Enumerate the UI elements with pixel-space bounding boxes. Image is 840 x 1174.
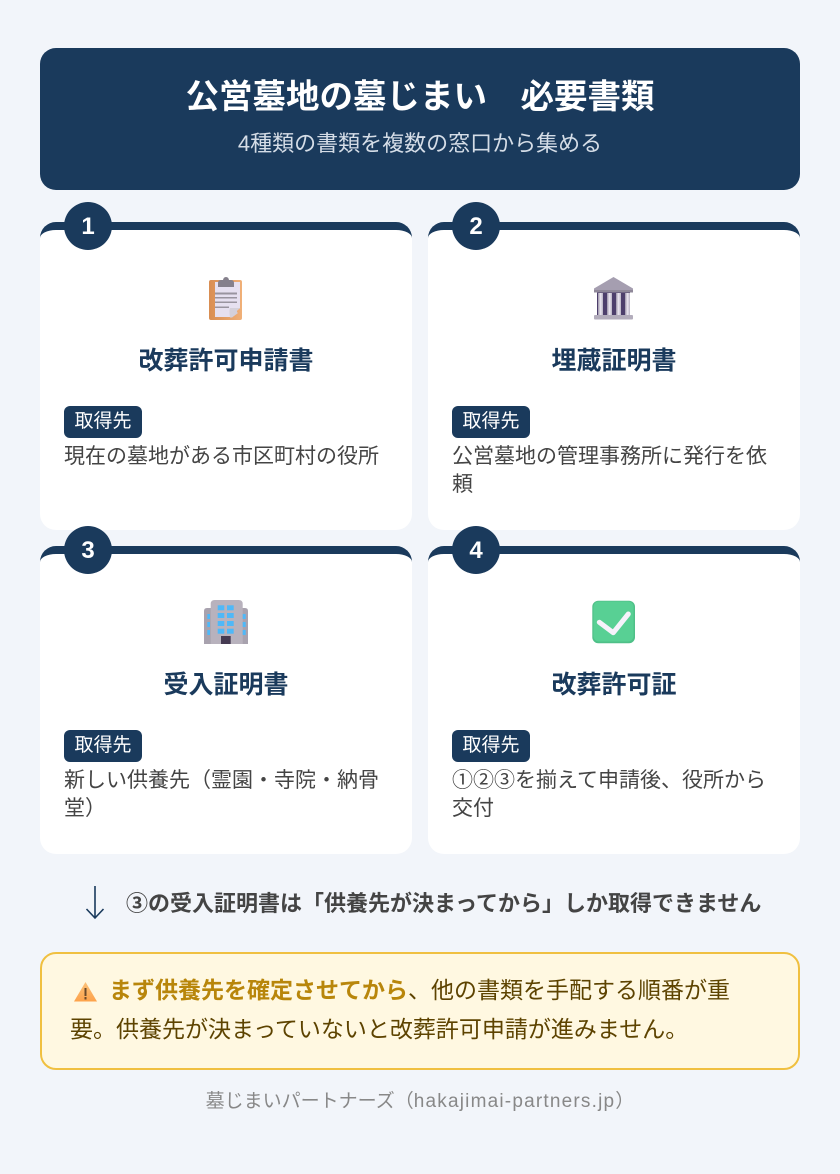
source text xyxy=(452,445,767,496)
card title: 改葬許可証 xyxy=(551,671,676,699)
source tag: 取得先 xyxy=(74,735,132,756)
source text: 交付 xyxy=(452,797,494,820)
card title: 改葬許可申請書 xyxy=(138,347,314,375)
panel: card 3 xyxy=(40,546,412,854)
note text: ③の受入証明書は「供養先が決まってから」しか取得できません xyxy=(126,891,761,916)
number badge 2 xyxy=(452,202,500,250)
card title: 受入証明書 xyxy=(163,671,288,699)
callout line 1: まず供養先を確定させてから、他の書類を手配する順番が重 xyxy=(109,977,730,1003)
source text: 堂） xyxy=(64,797,106,820)
source tag xyxy=(64,730,142,762)
source tag xyxy=(452,730,530,762)
icon: office building xyxy=(204,600,248,644)
callout: warning xyxy=(40,952,800,1070)
icon: government building xyxy=(594,277,633,320)
number badge 3: 3 xyxy=(81,537,95,564)
source tag: 取得先 xyxy=(74,411,132,432)
source text: 公営墓地の管理事務所に発行を依 xyxy=(452,445,767,468)
number badge 2: 2 xyxy=(469,213,483,240)
title: 公営墓地の墓じまい 必要書類 xyxy=(186,79,654,116)
subtitle: 4種類の書類を複数の窓口から集める xyxy=(238,131,602,156)
number badge 1 xyxy=(64,202,112,250)
icon: warning xyxy=(74,982,97,1002)
source text: 現在の墓地がある市区町村の役所 xyxy=(64,445,379,468)
panel: card 4 xyxy=(428,546,800,854)
header banner xyxy=(40,48,800,190)
panel: card 2 xyxy=(428,222,800,530)
source tag xyxy=(64,406,142,438)
icon: clipboard xyxy=(209,277,242,320)
number badge 4 xyxy=(452,526,500,574)
source text xyxy=(452,769,766,820)
panel: card 1 xyxy=(40,222,412,530)
source text: 頼 xyxy=(452,473,473,496)
arrow: down xyxy=(86,886,104,919)
source text: 新しい供養先（霊園・寺院・納骨 xyxy=(64,769,379,792)
icon: check mark xyxy=(592,600,635,644)
source tag xyxy=(452,406,530,438)
number badge 4: 4 xyxy=(469,537,483,564)
footer credit: 墓じまいパートナーズ（hakajimai-partners.jp） xyxy=(206,1091,634,1112)
callout line 2: 要。供養先が決まっていないと改葬許可申請が進みません。 xyxy=(70,1016,688,1042)
source text: ①②③を揃えて申請後、役所から xyxy=(452,769,766,792)
number badge 1: 1 xyxy=(81,213,95,240)
card title: 埋蔵証明書 xyxy=(551,347,676,375)
number badge 3 xyxy=(64,526,112,574)
source tag: 取得先 xyxy=(462,735,520,756)
source tag: 取得先 xyxy=(462,411,520,432)
source text xyxy=(64,769,379,820)
